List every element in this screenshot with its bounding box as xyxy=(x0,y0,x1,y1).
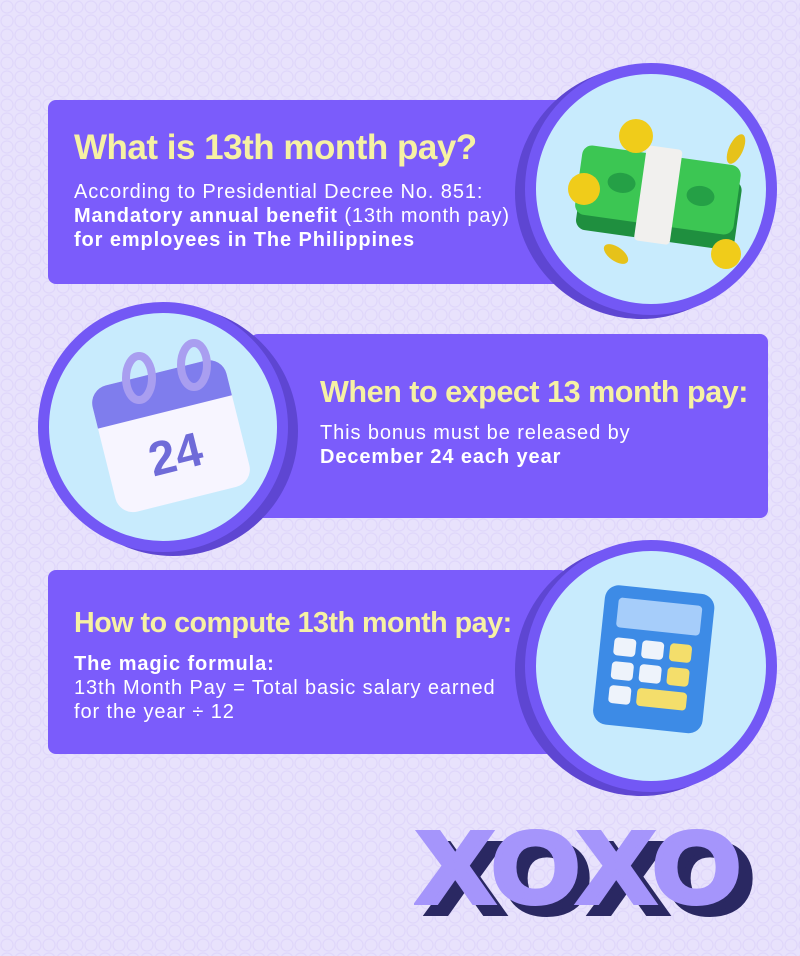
heading: when: When to expect 13 month pay: xyxy=(320,375,748,409)
text: formula xyxy=(74,653,496,723)
panel: when to expect xyxy=(250,334,768,518)
heading: what is: What is 13th month pay? xyxy=(74,128,477,167)
panel: how to compute xyxy=(48,570,568,754)
panel: what is 13th month pay xyxy=(48,100,568,284)
icon: money circle xyxy=(525,63,777,315)
icon: calendar circle xyxy=(38,302,288,552)
text: formula: 13th Month Pay = Total basic salary earned xyxy=(74,677,496,699)
heading: how: How to compute 13th month pay: xyxy=(74,607,512,639)
text: definition: According to Presidential Decree No. 851: xyxy=(74,181,483,203)
icon: calendar circle: 24 xyxy=(143,423,208,487)
text: formula: for the year ÷ 12 xyxy=(74,701,235,723)
text: definition xyxy=(74,181,510,251)
text: release date xyxy=(320,422,630,468)
text: release date: December 24 each year xyxy=(320,446,561,468)
text: release date: This bonus must be released by xyxy=(320,422,630,444)
text: definition: for employees in The Philippines xyxy=(74,229,415,251)
icon: calculator circle xyxy=(525,540,777,792)
text: formula: The magic formula: xyxy=(74,653,275,675)
text: definition: Mandatory annual benefit (13th month pay) xyxy=(74,205,510,227)
